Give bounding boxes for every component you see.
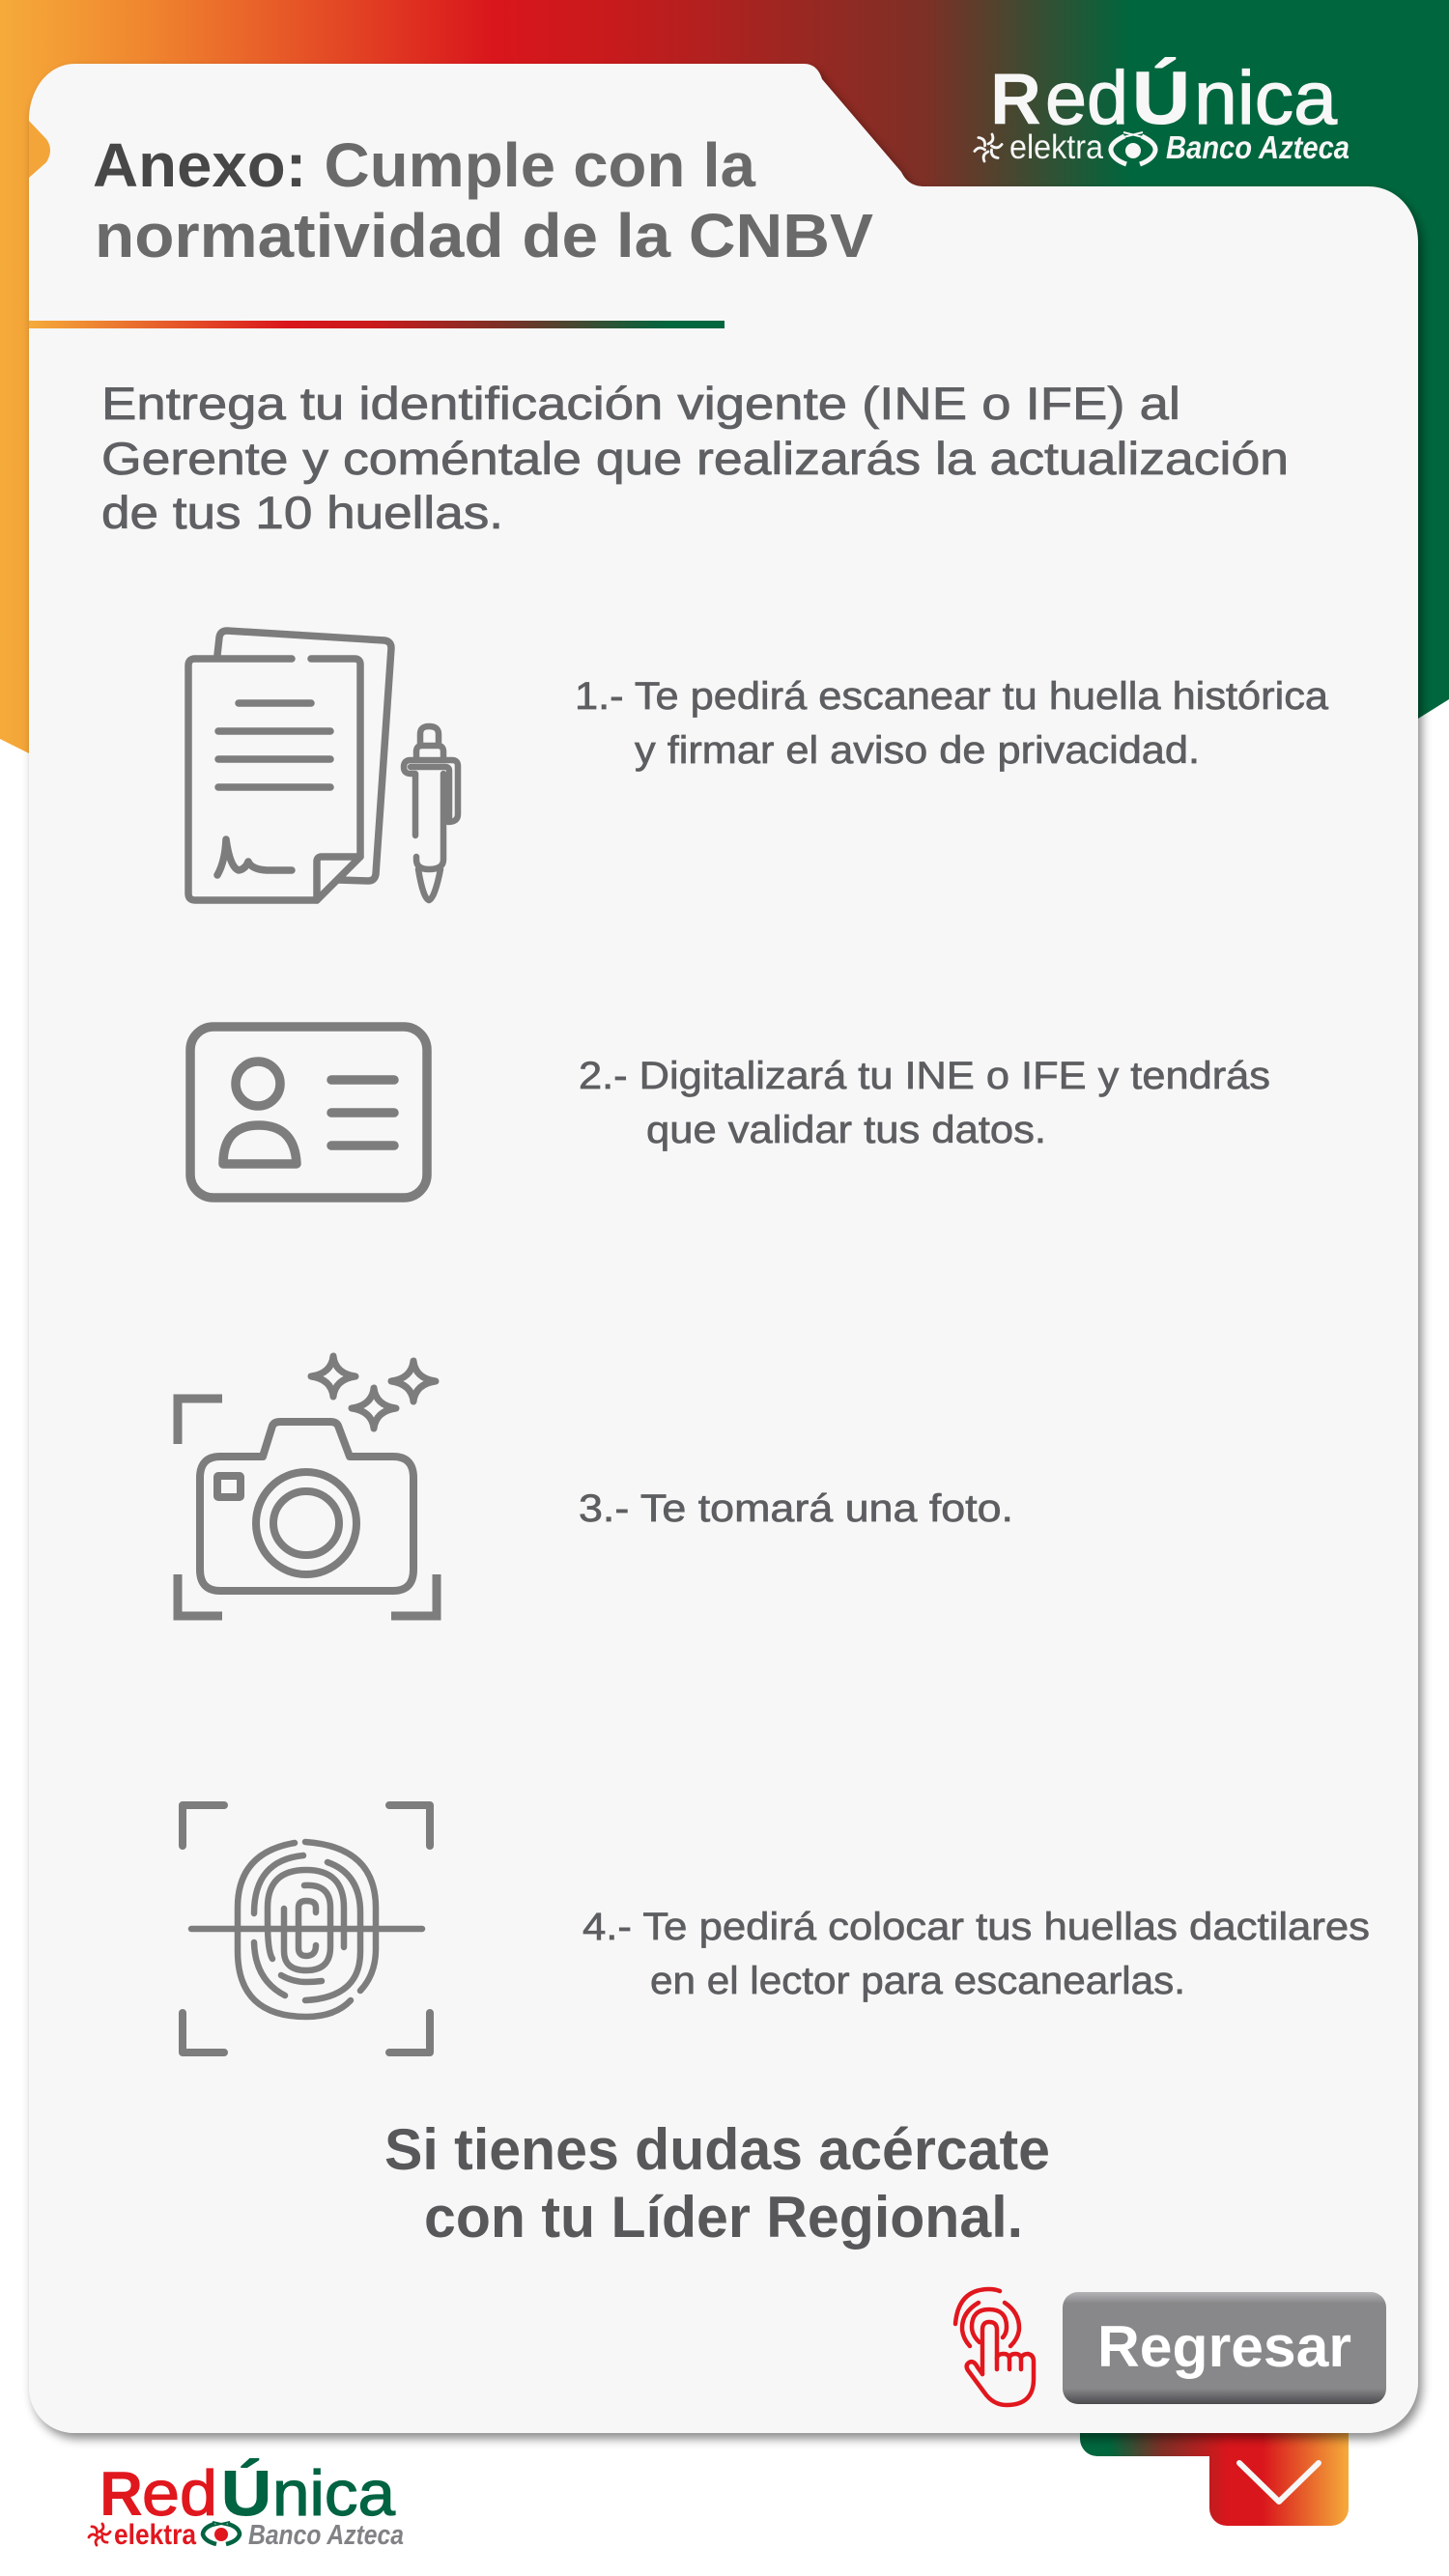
- logo eye: [203, 2522, 240, 2544]
- step 4 text: [582, 1906, 1370, 2002]
- logo: RedÚnica header: R: [990, 58, 1041, 139]
- logo: RedÚnica footer: nica: [272, 2457, 395, 2529]
- closing message: con tu Líder Regional.: [424, 2185, 1023, 2250]
- logo: RedÚnica header: Ú: [1132, 57, 1190, 140]
- icon: chevron down: [1239, 2463, 1319, 2502]
- icon: camera with sparkles: [178, 1356, 437, 1616]
- logo: RedÚnica footer: elektra: [114, 2519, 196, 2551]
- header gradient background: [0, 0, 1449, 753]
- sparkles: [311, 1356, 436, 1429]
- logo: RedÚnica footer: R: [99, 2458, 143, 2529]
- left notch accent: [29, 121, 50, 178]
- logo: RedÚnica footer: Banco Azteca: [248, 2520, 404, 2551]
- logo: RedÚnica footer: ed: [142, 2457, 217, 2529]
- title: [93, 130, 873, 270]
- logo: RedÚnica header: [974, 55, 1350, 166]
- button: Regresar: [1063, 2292, 1386, 2404]
- logo: RedÚnica header: ed: [1045, 55, 1128, 140]
- step 1 text: 1.- Te pedirá escanear tu huella histórica: [575, 675, 1329, 718]
- closing message: Si tienes dudas acércate: [384, 2117, 1050, 2182]
- logo swirl: [88, 2524, 111, 2545]
- title: Anexo: Cumple con la: [93, 130, 755, 200]
- icon: documents and pen: [188, 631, 458, 900]
- logo: RedÚnica header: nica: [1194, 55, 1338, 140]
- step 1 text: y firmar el aviso de privacidad.: [635, 729, 1200, 772]
- bottom gradient tab: [1080, 2415, 1349, 2526]
- logo: RedÚnica footer: [88, 2457, 404, 2551]
- step 3 text: 3.- Te tomará una foto.: [579, 1487, 1013, 1530]
- intro text: [101, 378, 1289, 538]
- logo: RedÚnica header: elektra: [1009, 128, 1103, 166]
- title: normatividad de la CNBV: [95, 201, 873, 270]
- step 4 text: en el lector para escanearlas.: [650, 1960, 1185, 2002]
- intro text: Gerente y coméntale que realizarás la actualización: [101, 433, 1289, 484]
- icon: pen: [404, 726, 458, 900]
- closing message: [384, 2117, 1050, 2250]
- intro text: de tus 10 huellas.: [101, 487, 503, 538]
- title divider: [29, 321, 724, 328]
- step 4 text: 4.- Te pedirá colocar tus huellas dactilares: [582, 1906, 1370, 1948]
- logo: RedÚnica footer: Ú: [221, 2457, 271, 2529]
- logo swirl: [974, 134, 1003, 161]
- logo eye: [1111, 132, 1155, 164]
- step 2 text: 2.- Digitalizará tu INE o IFE y tendrás: [579, 1055, 1270, 1097]
- icon: ID card: [190, 1027, 427, 1198]
- step 2 text: que validar tus datos.: [646, 1109, 1046, 1151]
- intro text: Entrega tu identificación vigente (INE o IFE) al: [101, 378, 1180, 429]
- logo: RedÚnica header: Banco Azteca: [1166, 129, 1350, 165]
- icon: fingerprint scan: [183, 1805, 430, 2052]
- step 2 text: [579, 1055, 1270, 1151]
- button: Regresar: Regresar: [1097, 2314, 1351, 2379]
- icon: tapping hand: [955, 2289, 1034, 2405]
- step 1 text: [575, 675, 1329, 772]
